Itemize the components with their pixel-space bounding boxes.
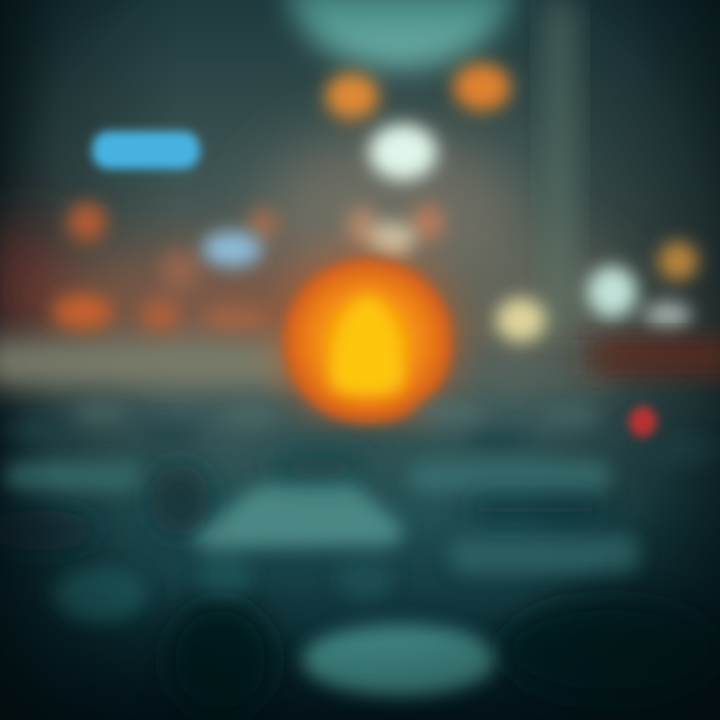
vertical pale column at right (545, 0, 575, 330)
blue rounded bar light (92, 131, 200, 169)
centre peach lights above orb (347, 205, 444, 258)
teal dome at top (285, 0, 515, 70)
right bokeh lights (587, 241, 698, 329)
left orange bokeh lights (53, 202, 279, 332)
dark red band at right (590, 340, 720, 374)
mottled foreground texture (10, 400, 720, 464)
orange lights below dome (325, 63, 511, 119)
red light (629, 406, 657, 438)
warm haze behind the orb (0, 130, 620, 360)
pale yellow light right of orb (496, 298, 546, 342)
dark gaps in foreground (0, 456, 720, 720)
teal blurred foreground shapes (5, 462, 640, 696)
main glowing orange orb (268, 243, 468, 437)
pale horizon band (0, 340, 610, 390)
pale blue light (202, 231, 262, 267)
white glowing light (369, 124, 437, 180)
